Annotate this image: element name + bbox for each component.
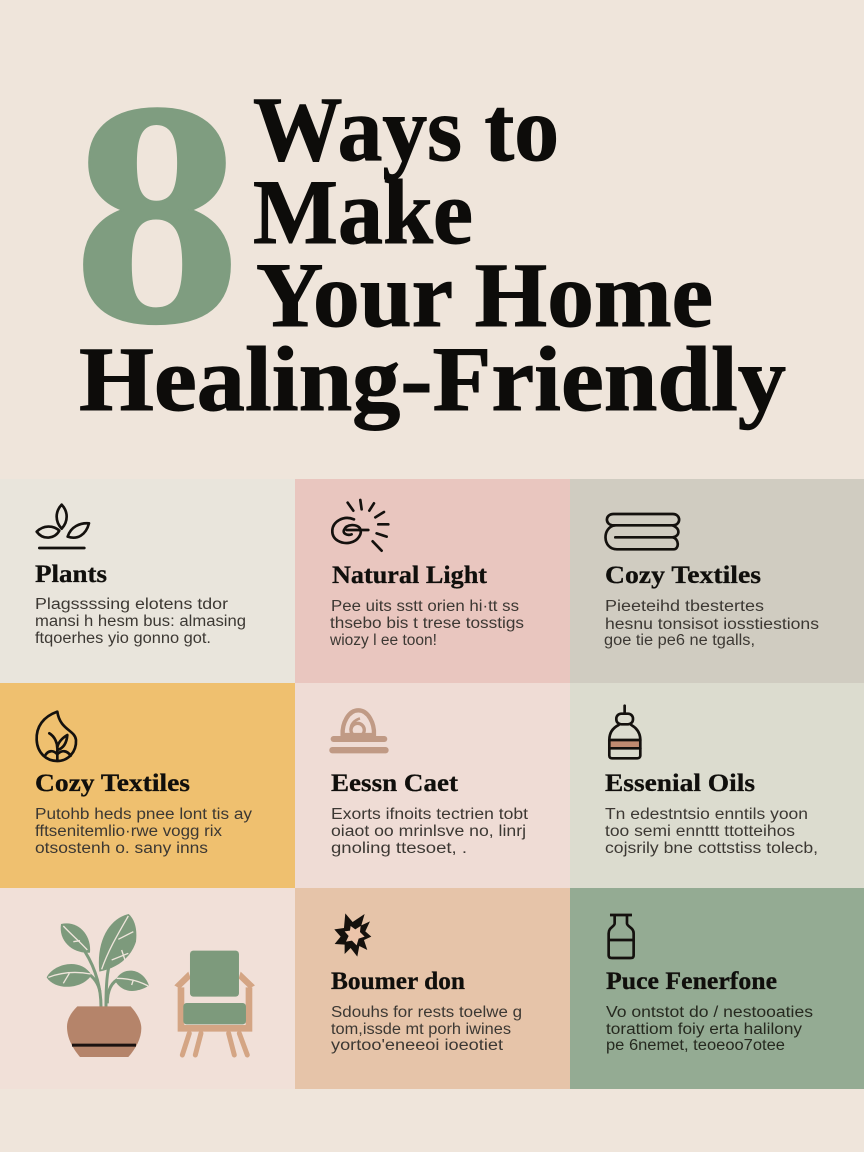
pot [67, 1006, 141, 1057]
title line: Ways to: Ways to [253, 78, 559, 180]
panel: Eessn Caet [295, 683, 570, 888]
body text [331, 806, 529, 857]
title line: Your Home: Your Home [256, 244, 713, 346]
body text: Pieeteihd tbestertes [605, 598, 764, 615]
body text: Pee uits sstt orien hi·tt ss [331, 598, 519, 615]
heading: Plants [35, 561, 107, 588]
body text [329, 598, 524, 649]
body text: goe tie pe6 ne tgalls, [604, 632, 755, 649]
icon: sun spiral [332, 500, 388, 551]
heading: Cozy Textiles [605, 562, 761, 589]
body text: ftqoerhes yio gonno got. [35, 630, 211, 647]
body text [605, 806, 818, 857]
body text [606, 1004, 813, 1054]
icon: diffuser stone [329, 710, 389, 753]
heading: Boumer don [331, 968, 465, 995]
big number 8: 8 [73, 37, 241, 391]
heading: Eessn Caet [331, 770, 459, 797]
panel: Boumer don [295, 888, 570, 1089]
body text: too semi ennttt ttotteihos [605, 823, 795, 840]
panel: Essential Oils [570, 683, 864, 888]
body text [35, 806, 252, 857]
body text: cojsrily bne cottstiss tolecb, [605, 840, 818, 857]
body text: gnoling ttesoet, . [331, 840, 467, 857]
title line: Make: Make [253, 161, 473, 263]
body text [604, 598, 819, 649]
icon: folded towels [606, 514, 679, 549]
icon: potted plant [47, 914, 149, 1057]
body text: Putohb heds pnee lont tis ay [35, 806, 252, 823]
panel: Plants [0, 479, 295, 683]
body text: Sdouhs for rests toelwe g [331, 1004, 522, 1021]
icon: flame leaf [37, 712, 76, 761]
body text: Tn edestntsio enntils yoon [605, 806, 808, 823]
icon: jar [609, 915, 634, 958]
icon: armchair [174, 951, 255, 1055]
panel: Natural Light [295, 479, 570, 683]
body text: otsostenh o. sany inns [35, 840, 208, 857]
heading: Cozy Textiles [35, 770, 190, 797]
body text: hesnu tonsisot iosstiestions [605, 616, 819, 633]
icon: oil bottle [609, 706, 640, 758]
body text [35, 596, 246, 647]
body text: tom,issde mt porh iwines [331, 1021, 511, 1038]
panel: Cozy Textiles yellow [0, 683, 295, 888]
panel: plant and chair illustration [0, 888, 295, 1089]
body text: yortoo'eneeoi ioeotiet [331, 1037, 504, 1054]
icon: starburst [334, 913, 371, 957]
icon: sprout [37, 505, 89, 548]
heading: Puce Fenerfone [606, 968, 777, 995]
panel: Cozy Textiles top [570, 479, 864, 683]
body text [331, 1004, 522, 1054]
body text: Vo ontstot do / nestooaties [606, 1004, 813, 1021]
body text: oiaot oo mrinlsve no, linrj [331, 823, 526, 840]
body text: fftsenitemlio·rwe vogg rix [35, 823, 222, 840]
body text: pe 6nemet, teoeoo7otee [606, 1037, 785, 1054]
body text: Plagssssing elotens tdor [35, 596, 228, 613]
body text: thsebo bis t trese tosstigs [330, 615, 524, 632]
panel: Puce Fenerfone [570, 888, 864, 1089]
heading: Essenial Oils [605, 770, 755, 797]
body text: wiozy l ee toon! [329, 632, 437, 649]
body text: Exorts ifnoits tectrien tobt [331, 806, 529, 823]
body text: mansi h hesm bus: almasing [35, 613, 246, 630]
title [73, 37, 786, 430]
body text: torattiom foiy erta halilony [606, 1021, 802, 1038]
heading: Natural Light [332, 562, 488, 589]
title line: Healing-Friendly: Healing-Friendly [79, 328, 786, 430]
